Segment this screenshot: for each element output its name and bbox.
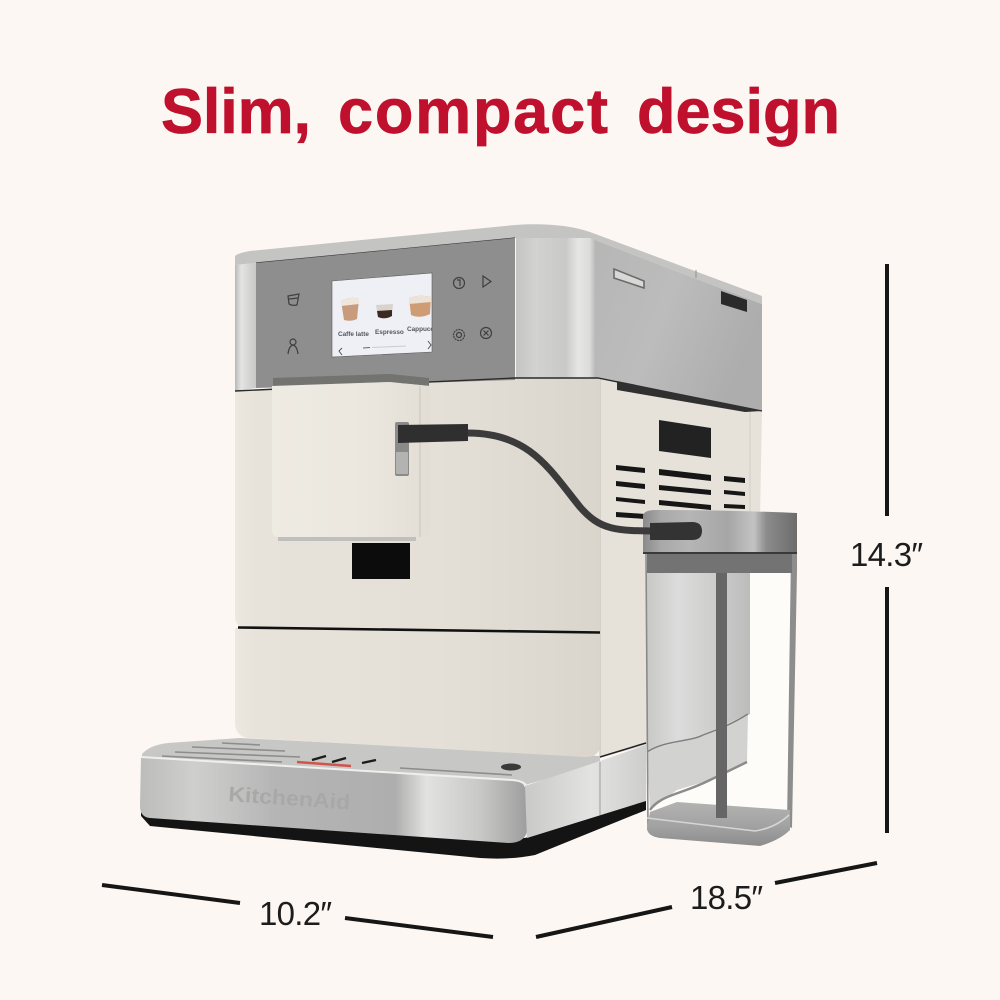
red indicator strip [297, 762, 351, 766]
cup: espresso [376, 304, 393, 318]
base steel front [140, 757, 527, 843]
coffee machine product illustration [140, 224, 797, 859]
side handle latch [614, 269, 644, 288]
drawer seam [238, 628, 600, 632]
icon: cup [288, 294, 299, 305]
icon: person [288, 339, 298, 354]
coffee outlet [352, 543, 410, 579]
right jug wall [787, 553, 797, 828]
icon: cancel [480, 328, 492, 338]
icon: clean cycle [454, 278, 464, 288]
carousel arrows [339, 341, 431, 355]
panel: machine front upper body [235, 378, 600, 633]
spout trim [278, 537, 416, 541]
dimension: height 14.3: 14.3″ [850, 536, 923, 573]
cup: cappuccino [409, 296, 431, 317]
side rear tab [721, 291, 747, 312]
milk straw [716, 573, 727, 818]
title: Slim, [161, 77, 311, 147]
touchscreen: Cappuccino [407, 326, 444, 333]
cup: caffe latte [341, 298, 359, 321]
jug lid [643, 510, 797, 553]
icon: play [483, 276, 491, 287]
screen labels: Caffe latte [338, 331, 369, 338]
tray button [501, 764, 521, 770]
lid inner band [647, 553, 792, 573]
black foot [141, 798, 646, 859]
title: design [637, 77, 840, 147]
dimension: depth 18.5 [536, 863, 877, 937]
embossed brand: KitchenAid [228, 783, 351, 814]
steel right side [595, 240, 762, 411]
icon: settings [454, 330, 464, 340]
touchscreen: Espresso [375, 329, 404, 336]
base steel side [525, 745, 646, 838]
control icons [288, 276, 492, 354]
steam vents below steel [617, 381, 762, 412]
panel: machine side body [600, 376, 762, 757]
dimension: width 10.2: 10.2″ [259, 895, 332, 932]
vent slots [616, 465, 745, 519]
grey control panel [256, 238, 515, 388]
touchscreen [332, 273, 444, 357]
top lid edge [235, 224, 762, 304]
milk tube [398, 424, 702, 540]
drip tray top [142, 738, 600, 785]
panel: steel top section [235, 224, 762, 412]
steel corner [516, 238, 596, 378]
milk jug glass [646, 553, 797, 846]
dimension: depth 18.5: 18.5″ [690, 879, 763, 916]
panel: front dispensing door [272, 374, 430, 579]
side handle recess [659, 420, 711, 458]
steam wand clip [395, 422, 409, 476]
panel: machine front lower drawer [235, 628, 600, 757]
jug glass body [646, 553, 797, 846]
panel: steel base [140, 738, 646, 859]
left steel strip [235, 263, 256, 391]
dimension: width 10.2 [102, 885, 493, 937]
title: compact [338, 77, 608, 147]
jug base [647, 802, 790, 846]
